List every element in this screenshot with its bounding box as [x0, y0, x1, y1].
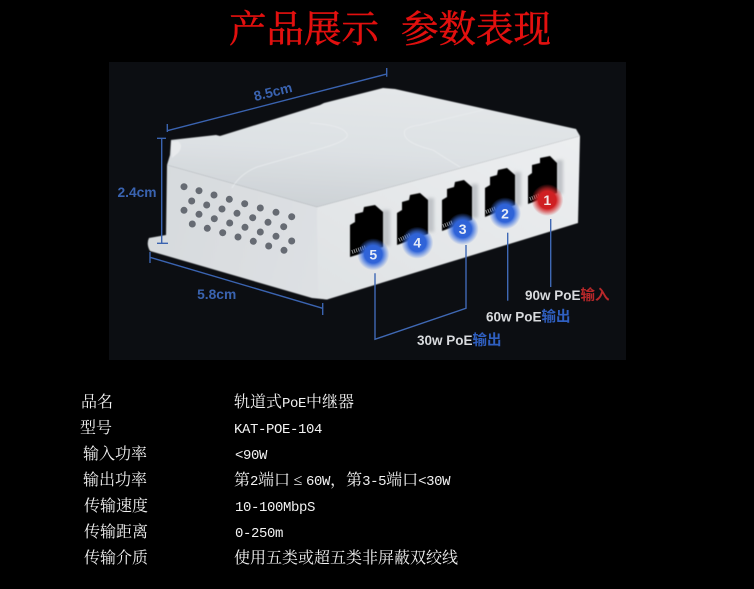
port badge 2	[489, 197, 521, 229]
corner tab	[171, 141, 181, 158]
port badge 1	[531, 184, 563, 216]
dimension: depth 5.8cm	[150, 252, 323, 315]
port recess shading	[382, 160, 563, 246]
port badge 1: 1	[543, 192, 551, 208]
row label: output power: 输出功率	[83, 472, 147, 489]
ventilation holes	[180, 183, 295, 254]
port badge 5	[357, 238, 389, 270]
row label: transfer speed: 传输速度	[84, 498, 148, 515]
dimension: height 2.4cm: 2.4cm	[117, 185, 157, 200]
top panel seam lines	[232, 110, 483, 188]
title	[229, 10, 551, 51]
row label: product name: 品名	[81, 394, 113, 411]
row value: output power: ，	[330, 472, 346, 489]
device front face	[317, 136, 580, 300]
row label: model: 型号	[80, 420, 112, 437]
port badge 5: 5	[369, 246, 377, 262]
dimension: width 8.5cm: 8.5cm	[252, 80, 294, 104]
row value: output power: 第2端口 60W 第3-5端口<30W	[234, 472, 450, 490]
port badge 3	[447, 213, 479, 245]
row label: transfer medium: 传输介质	[84, 550, 148, 567]
title: 产品展示	[229, 10, 379, 51]
row value: product name: 轨道式PoE中继器	[234, 394, 354, 412]
dimension: depth 5.8cm: 5.8cm	[197, 287, 236, 302]
row value: output power: ≤	[294, 472, 302, 489]
dimension: width 8.5cm	[167, 68, 387, 132]
port badge 4: 4	[413, 235, 421, 251]
device body	[148, 88, 580, 300]
port badge 3: 3	[459, 221, 467, 237]
label: 60w PoE output: 60w PoE输出	[486, 308, 571, 326]
spec table	[80, 393, 458, 567]
ethernet ports	[350, 156, 557, 257]
panel background	[109, 62, 626, 360]
port badge 4	[401, 227, 433, 259]
row value: input power: <90W	[235, 448, 267, 464]
title: 参数表现	[401, 10, 551, 51]
row value: transfer speed: 10-100MbpS	[235, 500, 315, 516]
row label: input power: 输入功率	[83, 446, 147, 463]
row label: transfer distance: 传输距离	[84, 524, 148, 541]
dimension: height 2.4cm	[117, 138, 168, 243]
port badge 2: 2	[501, 205, 509, 221]
device side face	[148, 165, 330, 300]
row value: transfer distance: 0-250m	[235, 526, 283, 542]
row value: model: KAT-POE-104	[234, 422, 322, 438]
label: 30w PoE output: 30w PoE输出	[417, 331, 502, 349]
device top face	[167, 88, 580, 207]
row value: transfer medium: 使用五类或超五类非屏蔽双绞线	[234, 550, 458, 567]
port contact pins	[352, 195, 540, 252]
label: 90w PoE input: 90w PoE输入	[525, 286, 610, 304]
callout lines	[375, 219, 551, 339]
